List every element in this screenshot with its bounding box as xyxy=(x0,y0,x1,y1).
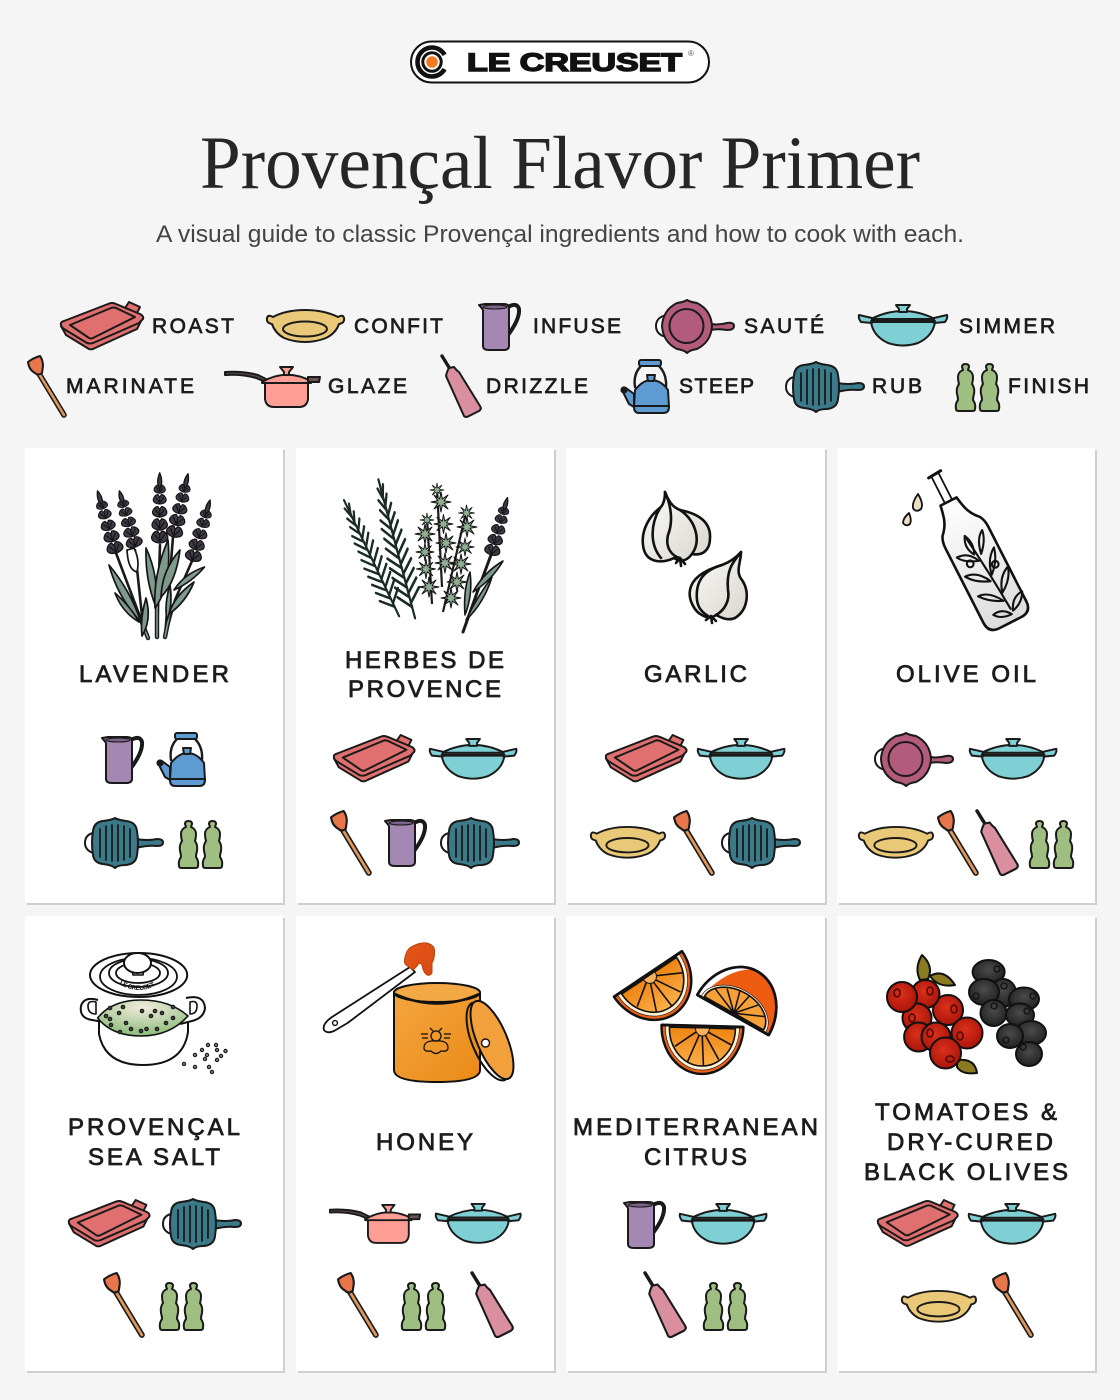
icon: rub xyxy=(441,818,519,868)
legend: roast: ROAST xyxy=(152,315,234,338)
card title: herbes de provence: PROVENCE xyxy=(348,676,501,703)
title: Provençal Flavor Primer xyxy=(200,122,920,205)
card title: herbes de provence: HERBES DE xyxy=(345,647,504,674)
icon: simmer xyxy=(680,1204,766,1244)
logo: Le Creuset xyxy=(411,42,709,82)
legend: finish xyxy=(956,364,1089,411)
legend: rub xyxy=(786,362,922,412)
icon: simmer xyxy=(436,1204,521,1243)
icon: marinate xyxy=(674,811,712,873)
icon: sauté xyxy=(875,733,953,786)
legend: drizzle: DRIZZLE xyxy=(486,375,588,398)
card title: mediterranean citrus: MEDITERRANEAN xyxy=(573,1114,818,1141)
card title: tomatoes and dry-cured black olives: BLACK OLIVES xyxy=(864,1159,1068,1186)
legend: confit: CONFIT xyxy=(354,315,443,338)
illustration: lavender xyxy=(90,472,218,638)
logo: Le Creuset: LE CREUSET xyxy=(467,49,682,77)
legend: finish: FINISH xyxy=(1008,375,1089,398)
icon: drizzle xyxy=(645,1273,686,1337)
icon: confit xyxy=(591,827,665,858)
illustration: olive oil bottle xyxy=(903,463,1032,634)
logo: Le Creuset: ® xyxy=(688,49,694,58)
card title: olive oil: OLIVE OIL xyxy=(896,661,1036,688)
icon: simmer xyxy=(970,739,1056,779)
icon: infuse xyxy=(385,820,425,866)
legend: roast xyxy=(61,302,234,349)
icon: confit xyxy=(902,1291,976,1322)
card title: tomatoes and dry-cured black olives: DRY-CURED xyxy=(887,1129,1053,1156)
icon: infuse xyxy=(624,1202,664,1248)
legend: drizzle xyxy=(442,356,588,417)
subtitle: A visual guide to classic Provençal ingredients and how to cook with each. xyxy=(156,221,964,248)
icon: finish xyxy=(1030,821,1073,868)
card title: provençal sea salt xyxy=(68,1114,240,1171)
legend: sauté xyxy=(656,300,824,353)
card title: honey: HONEY xyxy=(376,1129,473,1156)
icon: drizzle xyxy=(977,811,1018,875)
legend: confit xyxy=(267,310,443,342)
icon: marinate xyxy=(338,1273,376,1335)
icon: finish xyxy=(179,821,222,868)
icon: marinate xyxy=(104,1273,142,1335)
icon: finish xyxy=(402,1283,445,1330)
card title: mediterranean citrus xyxy=(573,1114,818,1171)
legend: marinate xyxy=(28,356,194,415)
panel: provençal sea salt xyxy=(25,916,285,1373)
legend: glaze xyxy=(225,367,407,407)
legend of cooking methods xyxy=(28,300,1089,417)
panel: tomatoes and black olives xyxy=(837,916,1097,1373)
legend: simmer: SIMMER xyxy=(959,315,1055,338)
icon: rub xyxy=(722,818,800,868)
icon: drizzle xyxy=(472,1273,513,1337)
icon: rub xyxy=(163,1199,241,1249)
card title: tomatoes and dry-cured black olives: TOMATOES & xyxy=(875,1099,1057,1126)
icon: simmer xyxy=(698,739,784,779)
icon: simmer xyxy=(969,1204,1055,1244)
illustration: tomatoes and olives xyxy=(887,955,1046,1073)
legend: infuse: INFUSE xyxy=(533,315,621,338)
panel: lavender xyxy=(25,448,285,905)
icon: finish xyxy=(160,1283,203,1330)
card title: provençal sea salt: SEA SALT xyxy=(88,1144,220,1171)
icon: marinate xyxy=(331,811,369,873)
legend: steep xyxy=(621,360,754,413)
illustration: citrus slices xyxy=(614,951,793,1075)
icon: roast xyxy=(334,735,415,781)
panel: herbes de provence xyxy=(296,448,556,905)
icon: marinate xyxy=(993,1273,1031,1335)
card title: lavender: LAVENDER xyxy=(79,661,229,688)
panel: olive oil xyxy=(837,448,1097,905)
illustration: herbs xyxy=(334,477,515,632)
icon: roast xyxy=(878,1200,958,1246)
legend: sauté: SAUTÉ xyxy=(744,315,824,338)
legend: steep: STEEP xyxy=(679,375,754,398)
panel: garlic xyxy=(566,448,827,905)
icon: simmer xyxy=(430,739,516,779)
card title: tomatoes and dry-cured black olives xyxy=(864,1099,1068,1186)
icon: confit xyxy=(859,827,933,858)
illustration: salt pot xyxy=(80,952,228,1074)
icon: roast xyxy=(69,1200,150,1246)
illustration: salt pot: LE CREUSET xyxy=(120,980,154,990)
card title: garlic: GARLIC xyxy=(644,661,747,688)
legend: rub: RUB xyxy=(872,375,922,398)
card title: mediterranean citrus: CITRUS xyxy=(644,1144,747,1171)
legend: glaze: GLAZE xyxy=(328,375,407,398)
icon: rub xyxy=(85,818,163,868)
icon: infuse xyxy=(102,737,142,783)
icon: glaze xyxy=(330,1205,420,1243)
panel: honey xyxy=(296,916,556,1373)
legend: marinate: MARINATE xyxy=(66,375,194,398)
legend: infuse xyxy=(479,304,621,350)
panel: mediterranean citrus xyxy=(566,916,827,1373)
icon: roast xyxy=(606,735,687,781)
legend: simmer xyxy=(859,305,1055,346)
icon: steep xyxy=(157,733,205,786)
icon: marinate xyxy=(938,811,976,873)
icon: finish xyxy=(704,1283,747,1330)
card title: provençal sea salt: PROVENÇAL xyxy=(68,1114,240,1141)
illustration: garlic xyxy=(643,492,747,623)
card title: herbes de provence xyxy=(345,647,504,703)
illustration: honey pot and dipper xyxy=(324,943,522,1086)
